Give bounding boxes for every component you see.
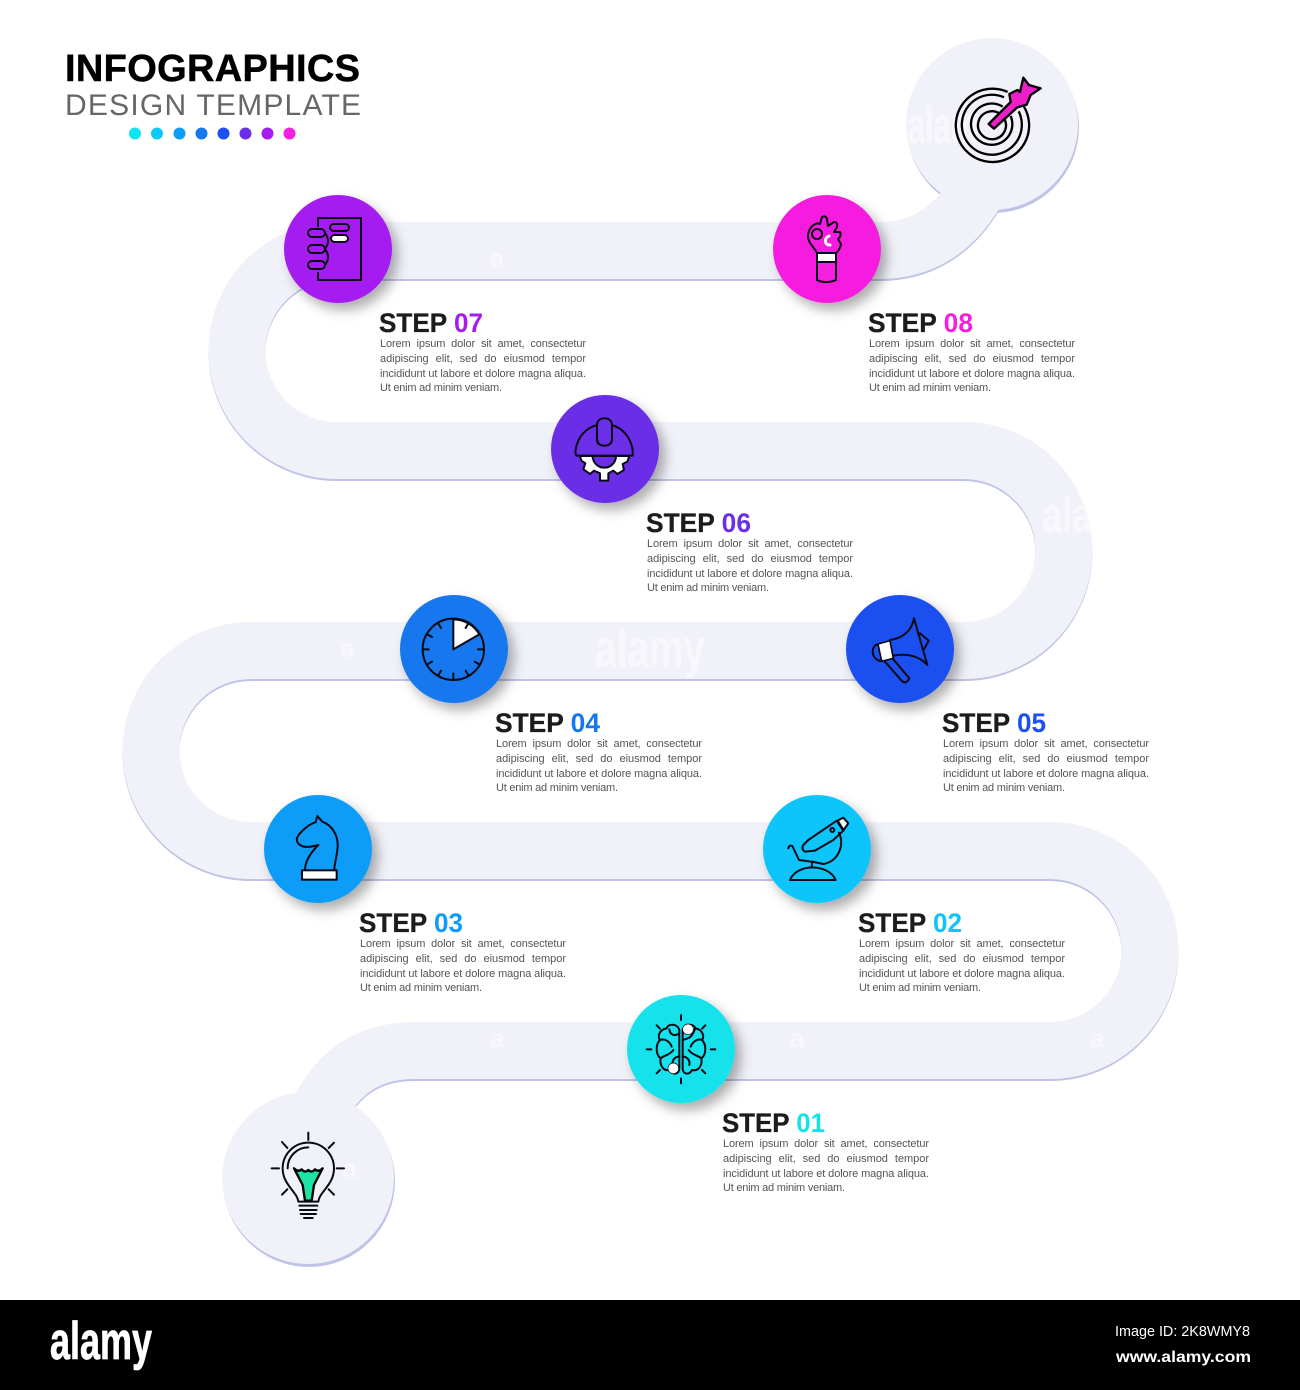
- text block: step 05: Ut enim ad minim veniam.: [943, 782, 1065, 794]
- text block: step 06: incididunt ut labore et dolore magna aliqua.: [647, 568, 853, 580]
- text block: step 04: STEP 04: [495, 708, 600, 738]
- title: [65, 48, 361, 140]
- icon: stopwatch clock: [423, 619, 484, 680]
- icon: lightbulb: [272, 1133, 344, 1218]
- heading: infographics: INFOGRAPHICS: [65, 48, 360, 90]
- text block: step 03: adipiscing elit, sed do eiusmod tempor: [360, 953, 566, 965]
- text block: step 05: STEP 05: [942, 708, 1046, 738]
- text block: step 05: incididunt ut labore et dolore magna aliqua.: [943, 768, 1149, 780]
- stock watermarks on road: alamy: [595, 619, 705, 679]
- subheading: design template: DESIGN TEMPLATE: [65, 89, 361, 122]
- text block: step 03: Lorem ipsum dolor sit amet, consectetur: [360, 938, 566, 950]
- text block: step 02: STEP 02: [858, 908, 962, 938]
- text block: step 01: incididunt ut labore et dolore magna aliqua.: [723, 1168, 929, 1180]
- footer bar: [0, 1300, 1300, 1390]
- text block: step 04: incididunt ut labore et dolore magna aliqua.: [496, 768, 702, 780]
- text block: step 01: Lorem ipsum dolor sit amet, consectetur: [723, 1138, 929, 1150]
- text block: step 06: Ut enim ad minim veniam.: [647, 582, 769, 594]
- step 04 node: [400, 595, 508, 703]
- stock watermarks on road: a: [790, 243, 805, 273]
- marker circle 06: [551, 395, 659, 503]
- marker circle 02: [763, 795, 871, 903]
- stock watermarks on road: a: [1090, 1023, 1105, 1053]
- marker circle 01: [627, 995, 735, 1103]
- text block: step 02: Ut enim ad minim veniam.: [859, 982, 981, 994]
- stock watermarks on road: a: [490, 1023, 505, 1053]
- step 01 node: [627, 995, 735, 1103]
- step 07 node: [284, 195, 392, 303]
- icon: ok hand: [808, 216, 841, 282]
- stock watermarks on road: a: [490, 243, 505, 273]
- text block: step 08: [868, 308, 1075, 394]
- text block: step 01: Ut enim ad minim veniam.: [723, 1182, 845, 1194]
- text block: step 07: [379, 308, 586, 394]
- text block: step 03: STEP 03: [359, 908, 463, 938]
- icon: microscope: [788, 818, 848, 880]
- text block: step 04: adipiscing elit, sed do eiusmod tempor: [496, 753, 702, 765]
- text block: step 04: Lorem ipsum dolor sit amet, consectetur: [496, 738, 702, 750]
- text block: step 05: [942, 708, 1149, 794]
- image id: Image ID: 2K8WMY8: [1115, 1323, 1250, 1340]
- step 06 node: [551, 395, 659, 503]
- icon: helmet with gear: [575, 418, 633, 481]
- text block: step 03: [359, 908, 566, 994]
- icon: chess knight: [297, 816, 338, 880]
- stock watermarks on road: a: [342, 1153, 357, 1183]
- colour dots: [129, 128, 296, 140]
- marker circle 08: [773, 195, 881, 303]
- step 05 node: [846, 595, 954, 703]
- text block: step 05: Lorem ipsum dolor sit amet, consectetur: [943, 738, 1149, 750]
- stock watermarks on road: a: [340, 633, 355, 663]
- icon: brain: [647, 1015, 715, 1083]
- text block: step 06: Lorem ipsum dolor sit amet, consectetur: [647, 538, 853, 550]
- stock watermarks on road: [340, 97, 1105, 1183]
- stock watermarks on road: a: [790, 1023, 805, 1053]
- website: www.alamy.com: [1115, 1349, 1251, 1366]
- icon: notebook: [308, 218, 361, 280]
- text block: step 07: adipiscing elit, sed do eiusmod tempor: [380, 353, 586, 365]
- stock watermarks on road: alam: [908, 97, 978, 155]
- stock watermarks on road: ala: [1042, 487, 1093, 543]
- text block: step 03: incididunt ut labore et dolore magna aliqua.: [360, 968, 566, 980]
- marker circle 03: [264, 795, 372, 903]
- text block: step 06: [646, 508, 853, 594]
- text block: step 01: STEP 01: [722, 1108, 825, 1138]
- text block: step 08: Ut enim ad minim veniam.: [869, 382, 991, 394]
- footer logo: alamy: [50, 1312, 152, 1371]
- text block: step 02: incididunt ut labore et dolore magna aliqua.: [859, 968, 1065, 980]
- step 08 node: [773, 195, 881, 303]
- icon: megaphone: [873, 618, 929, 682]
- marker circle 07: [284, 195, 392, 303]
- text block: step 05: adipiscing elit, sed do eiusmod tempor: [943, 753, 1149, 765]
- text block: step 06: adipiscing elit, sed do eiusmod tempor: [647, 553, 853, 565]
- text block: step 02: adipiscing elit, sed do eiusmod tempor: [859, 953, 1065, 965]
- text block: step 02: [858, 908, 1065, 994]
- text block: step 06: STEP 06: [646, 508, 751, 538]
- text block: step 01: [722, 1108, 929, 1194]
- icon: target with arrow: [956, 78, 1041, 162]
- marker circle 05: [846, 595, 954, 703]
- text block: step 02: Lorem ipsum dolor sit amet, consectetur: [859, 938, 1065, 950]
- text block: step 07: Ut enim ad minim veniam.: [380, 382, 502, 394]
- step 03 node: [264, 795, 372, 903]
- text block: step 03: Ut enim ad minim veniam.: [360, 982, 482, 994]
- text block: step 07: STEP 07: [379, 308, 483, 338]
- text block: step 01: adipiscing elit, sed do eiusmod tempor: [723, 1153, 929, 1165]
- marker circle 04: [400, 595, 508, 703]
- text block: step 08: Lorem ipsum dolor sit amet, consectetur: [869, 338, 1075, 350]
- bulb outline and rays: [272, 1133, 344, 1218]
- text block: step 08: incididunt ut labore et dolore magna aliqua.: [869, 368, 1075, 380]
- text block: step 08: STEP 08: [868, 308, 973, 338]
- text block: step 08: adipiscing elit, sed do eiusmod tempor: [869, 353, 1075, 365]
- text block: step 07: incididunt ut labore et dolore magna aliqua.: [380, 368, 586, 380]
- text block: step 04: Ut enim ad minim veniam.: [496, 782, 618, 794]
- text block: step 07: Lorem ipsum dolor sit amet, consectetur: [380, 338, 586, 350]
- green filament: [294, 1168, 323, 1201]
- text block: step 04: [495, 708, 702, 794]
- winding road path with start and goal discs: [151, 38, 1150, 1267]
- step 02 node: [763, 795, 871, 903]
